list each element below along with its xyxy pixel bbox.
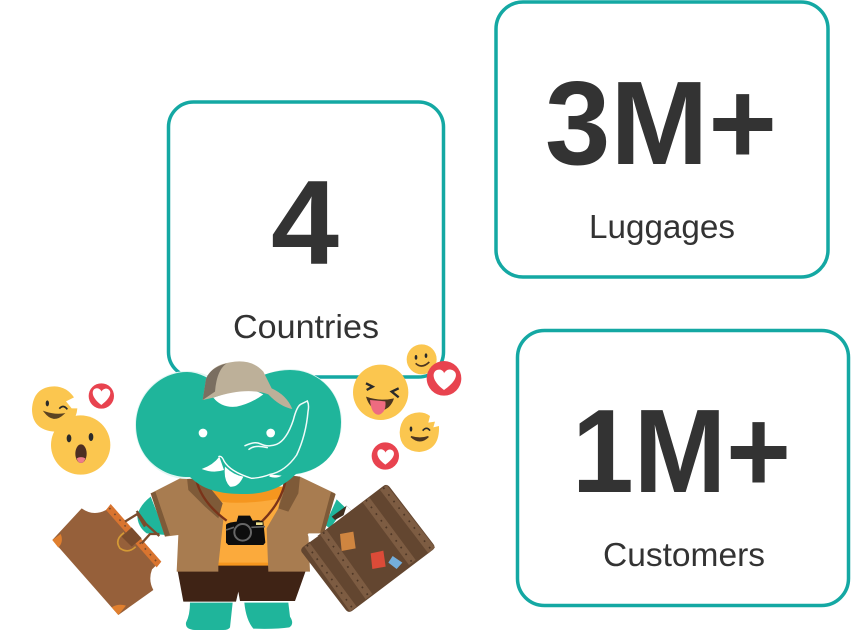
handle [125,511,159,543]
jacket [151,475,335,572]
teeth [202,457,282,487]
left suitcase and hand [52,504,161,615]
stickers [340,532,356,551]
label: Countries: Countries [233,308,379,345]
head and ears [135,369,342,494]
emoji: wink [32,386,77,432]
sleeve cuffs [151,492,336,537]
cap [203,361,292,409]
suitcase body [301,485,435,612]
mouth line [218,456,270,478]
panel: customers [518,330,848,606]
panel: luggages [496,2,828,277]
camera [226,516,265,545]
suitcase strips [304,485,435,612]
number: 1M+: 1M+ [572,385,791,518]
cap visor [213,387,263,407]
suitcase corners [52,534,126,615]
body [137,473,345,630]
emoji: surprised [51,415,110,475]
white jacket gap [308,534,318,542]
icon: heart badge [89,383,114,409]
emoji: wink small [400,412,439,452]
collars [187,473,300,518]
panel: countries [168,102,444,377]
label: Luggages: Luggages [589,208,735,245]
suitcase body [52,505,160,615]
trunk outline [245,401,309,474]
suitcase strip [106,504,161,567]
emojis left [32,383,114,475]
right arm [325,499,345,528]
left arm [137,497,166,535]
emojis right [353,344,461,470]
camera strap [195,473,287,522]
eyes [199,429,207,437]
clasp [122,527,142,547]
emoji: tongue [353,365,408,420]
shorts [178,566,306,602]
cap shade [203,363,227,400]
number: 3M+: 3M+ [545,57,777,190]
icon: heart badge small [372,442,399,470]
legs [186,603,292,630]
number: 4: 4 [271,156,339,290]
illustration: elephant traveller [52,361,435,630]
shirt [205,487,283,567]
icon: heart badge large [427,361,461,396]
handle [332,506,352,520]
emoji: smile [407,344,437,374]
face [199,361,309,487]
right suitcase [301,485,435,612]
label: Customers: Customers [603,536,765,573]
clasp ring [118,533,136,551]
